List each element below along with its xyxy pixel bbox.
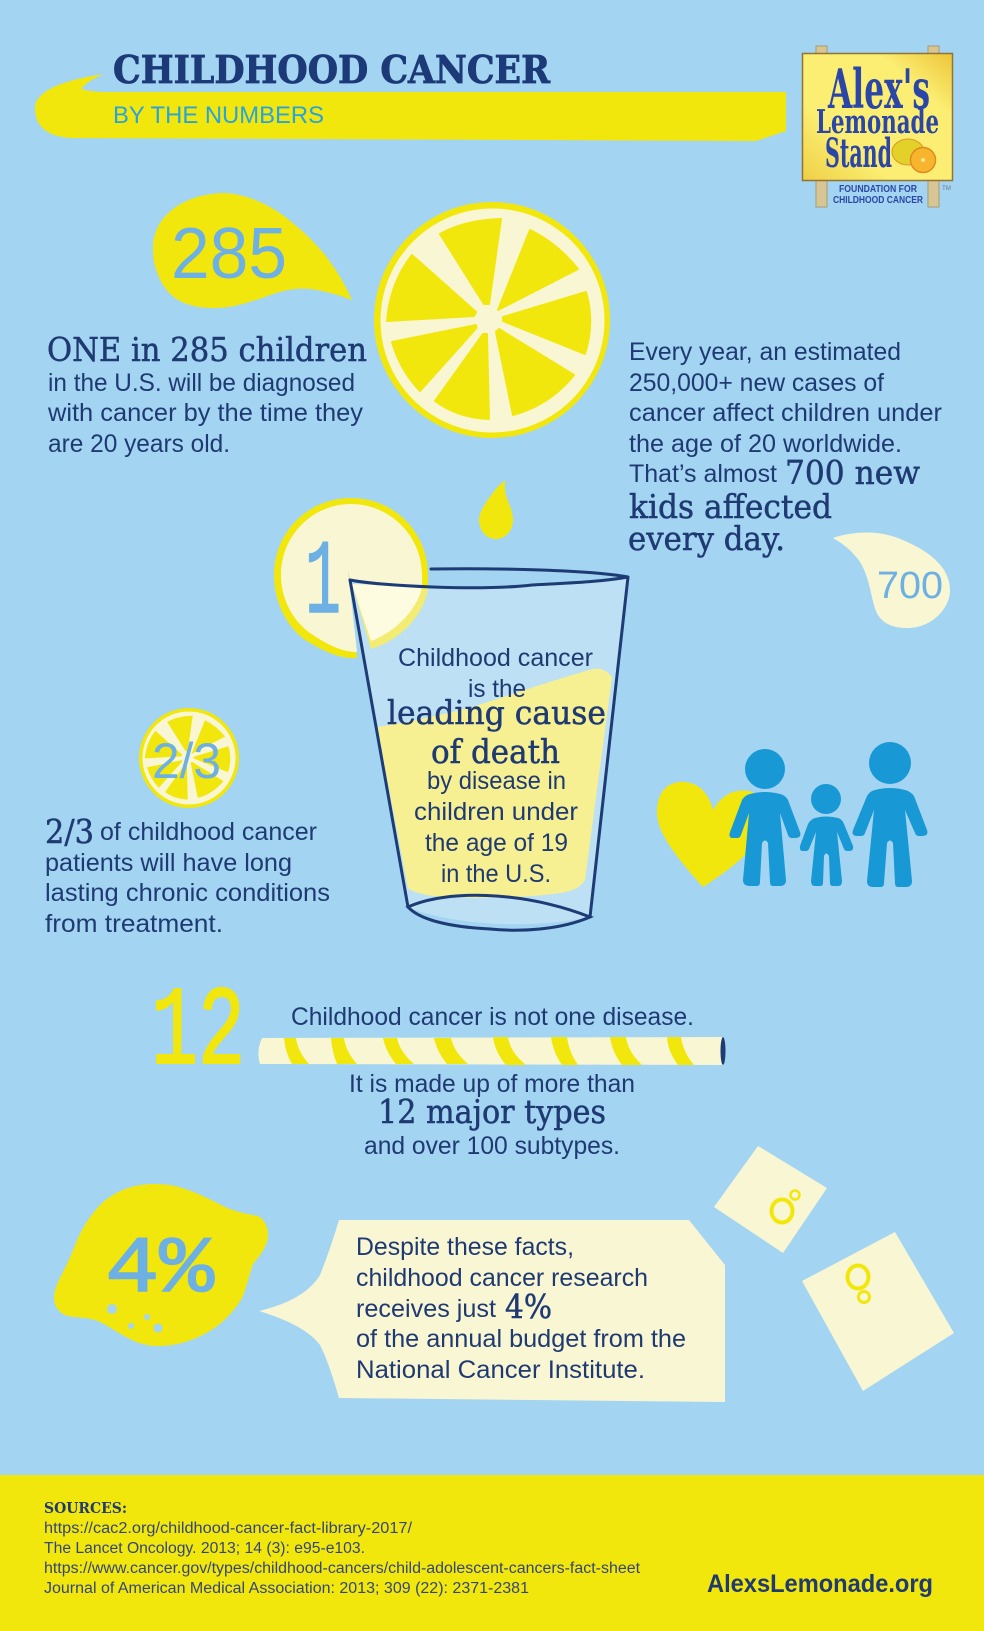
heart (657, 782, 753, 887)
stat: 285 bubble (153, 193, 352, 308)
number 12: 12 (151, 970, 245, 1097)
pith (142, 712, 236, 804)
website: AlexsLemonade.org (707, 1570, 933, 1598)
text: 250,000+ cases: kids affected (629, 487, 832, 526)
text: 250,000+ cases: 700 new (785, 453, 920, 492)
blob dots (107, 1304, 162, 1332)
callout text: childhood cancer research (356, 1264, 648, 1292)
sign posts (816, 46, 939, 207)
sources list: Journal of American Medical Association: 2013; 309 (22): 2371-2381 (44, 1580, 529, 1597)
text: 2/3 chronic conditions: 2/3 (45, 812, 94, 851)
callout text: Despite these facts, (356, 1233, 574, 1261)
header banner (35, 47, 786, 141)
child (800, 784, 853, 886)
callout text: of the annual budget from the (356, 1325, 686, 1353)
cream drop (833, 533, 950, 628)
sources heading: SOURCES: (44, 1499, 127, 1517)
lines below straw: 12 major types (378, 1092, 606, 1131)
number 285: 285 (171, 214, 287, 294)
text: 250,000+ cases (628, 338, 942, 558)
title: CHILDHOOD CANCER (113, 47, 550, 92)
text: 2/3 chronic conditions: patients will have long (45, 849, 292, 877)
lemon square top (714, 1146, 827, 1253)
sources list: https://www.cancer.gov/types/childhood-cancers/child-adolescent-cancers-fact-sheet (44, 1560, 641, 1577)
wedge pith (281, 504, 422, 652)
logo tagline: CHILDHOOD CANCER (833, 195, 924, 206)
adult left (729, 749, 800, 886)
text: 2/3 chronic conditions: lasting chronic conditions (45, 879, 330, 907)
rind (374, 202, 610, 438)
small lemon with 2/3 (139, 708, 239, 808)
heart and family (657, 742, 927, 887)
lemon wedge on rim with number 1 (274, 498, 428, 658)
number 4%: 4% (105, 1225, 215, 1316)
lemon slice large (374, 202, 610, 438)
body lines: in the U.S. will be diagnosed (48, 369, 355, 397)
highlight heading: ONE in 285 children (47, 330, 367, 369)
glass text: by disease in (427, 767, 566, 795)
lines below straw: It is made up of more than (349, 1070, 635, 1098)
text: 2/3 chronic conditions: of childhood cancer (100, 818, 317, 846)
stat: 4% lemon blob (54, 1184, 268, 1346)
lemon drop (479, 480, 513, 539)
glass text: Childhood cancer (398, 644, 593, 672)
lemon square bottom (802, 1232, 954, 1391)
text: 2/3 chronic conditions: from treatment. (45, 910, 223, 938)
logo tagline (833, 184, 951, 206)
footer band (0, 1475, 984, 1631)
segments (145, 716, 230, 800)
banner swoosh (35, 74, 786, 141)
sign board (802, 54, 952, 180)
callout text: receives just (356, 1295, 496, 1323)
rind (139, 708, 239, 808)
glass text: the age of 19 (425, 829, 568, 857)
subtitle: BY THE NUMBERS (113, 102, 324, 129)
callout text: National Cancer Institute. (356, 1356, 645, 1384)
glass text: leading cause (387, 693, 606, 732)
glass outline (350, 569, 628, 930)
logo tagline: TM (942, 186, 951, 192)
logo tagline: FOUNDATION FOR (839, 184, 918, 195)
logo: Alex's Lemonade Stand sign (802, 46, 952, 207)
glass text: is the (468, 675, 526, 703)
text: 250,000+ cases: That’s almost (629, 460, 777, 488)
straw (258, 1037, 726, 1065)
callout text (356, 1233, 686, 1384)
callout text: 4% (505, 1287, 552, 1326)
blob (54, 1184, 268, 1346)
wedge inside glass (352, 584, 428, 649)
lines below straw: and over 100 subtypes. (364, 1132, 620, 1160)
logo lemons (892, 139, 936, 172)
text: 250,000+ cases: 250,000+ new cases of (629, 369, 884, 397)
pith (380, 208, 604, 432)
speech drop (153, 193, 352, 308)
text: 250,000+ cases: every day. (628, 519, 785, 558)
sources list: https://cac2.org/childhood-cancer-fact-library-2017/ (44, 1520, 413, 1537)
body lines (47, 369, 363, 458)
text: 250,000+ cases: Every year, an estimated (629, 338, 901, 366)
number 2/3: 2/3 (152, 733, 221, 789)
logo wordmark (816, 57, 939, 177)
glass text (387, 644, 606, 888)
number 700: 700 (877, 565, 943, 607)
text: 250,000+ cases: the age of 20 worldwide. (629, 430, 902, 458)
glass text: children under (414, 798, 578, 826)
stat: 12 types (151, 970, 726, 1160)
line above straw: Childhood cancer is not one disease. (291, 1003, 694, 1031)
glass text: of death (431, 732, 560, 771)
glass body (350, 577, 628, 924)
text: one in 285 (47, 330, 367, 458)
text: 2/3 chronic conditions (45, 812, 330, 938)
callout shape (259, 1220, 725, 1402)
lines below straw (349, 1070, 635, 1160)
sources list (44, 1520, 641, 1597)
body lines: with cancer by the time they (47, 399, 363, 427)
number 1: 1 (305, 524, 341, 644)
wedge rind (274, 498, 428, 658)
lemonade (377, 669, 612, 898)
segments (387, 219, 590, 419)
adult right (852, 742, 927, 887)
text: 250,000+ cases: cancer affect children under (629, 399, 942, 427)
700 drop (833, 533, 950, 628)
body lines: are 20 years old. (48, 430, 230, 458)
glass of lemonade (350, 569, 628, 930)
glass text: in the U.S. (441, 860, 551, 888)
callout: 4% funding (259, 1220, 725, 1402)
logo wordmark: Stand (825, 130, 892, 177)
sources list: The Lancet Oncology. 2013; 14 (3): e95-e103. (44, 1540, 365, 1557)
